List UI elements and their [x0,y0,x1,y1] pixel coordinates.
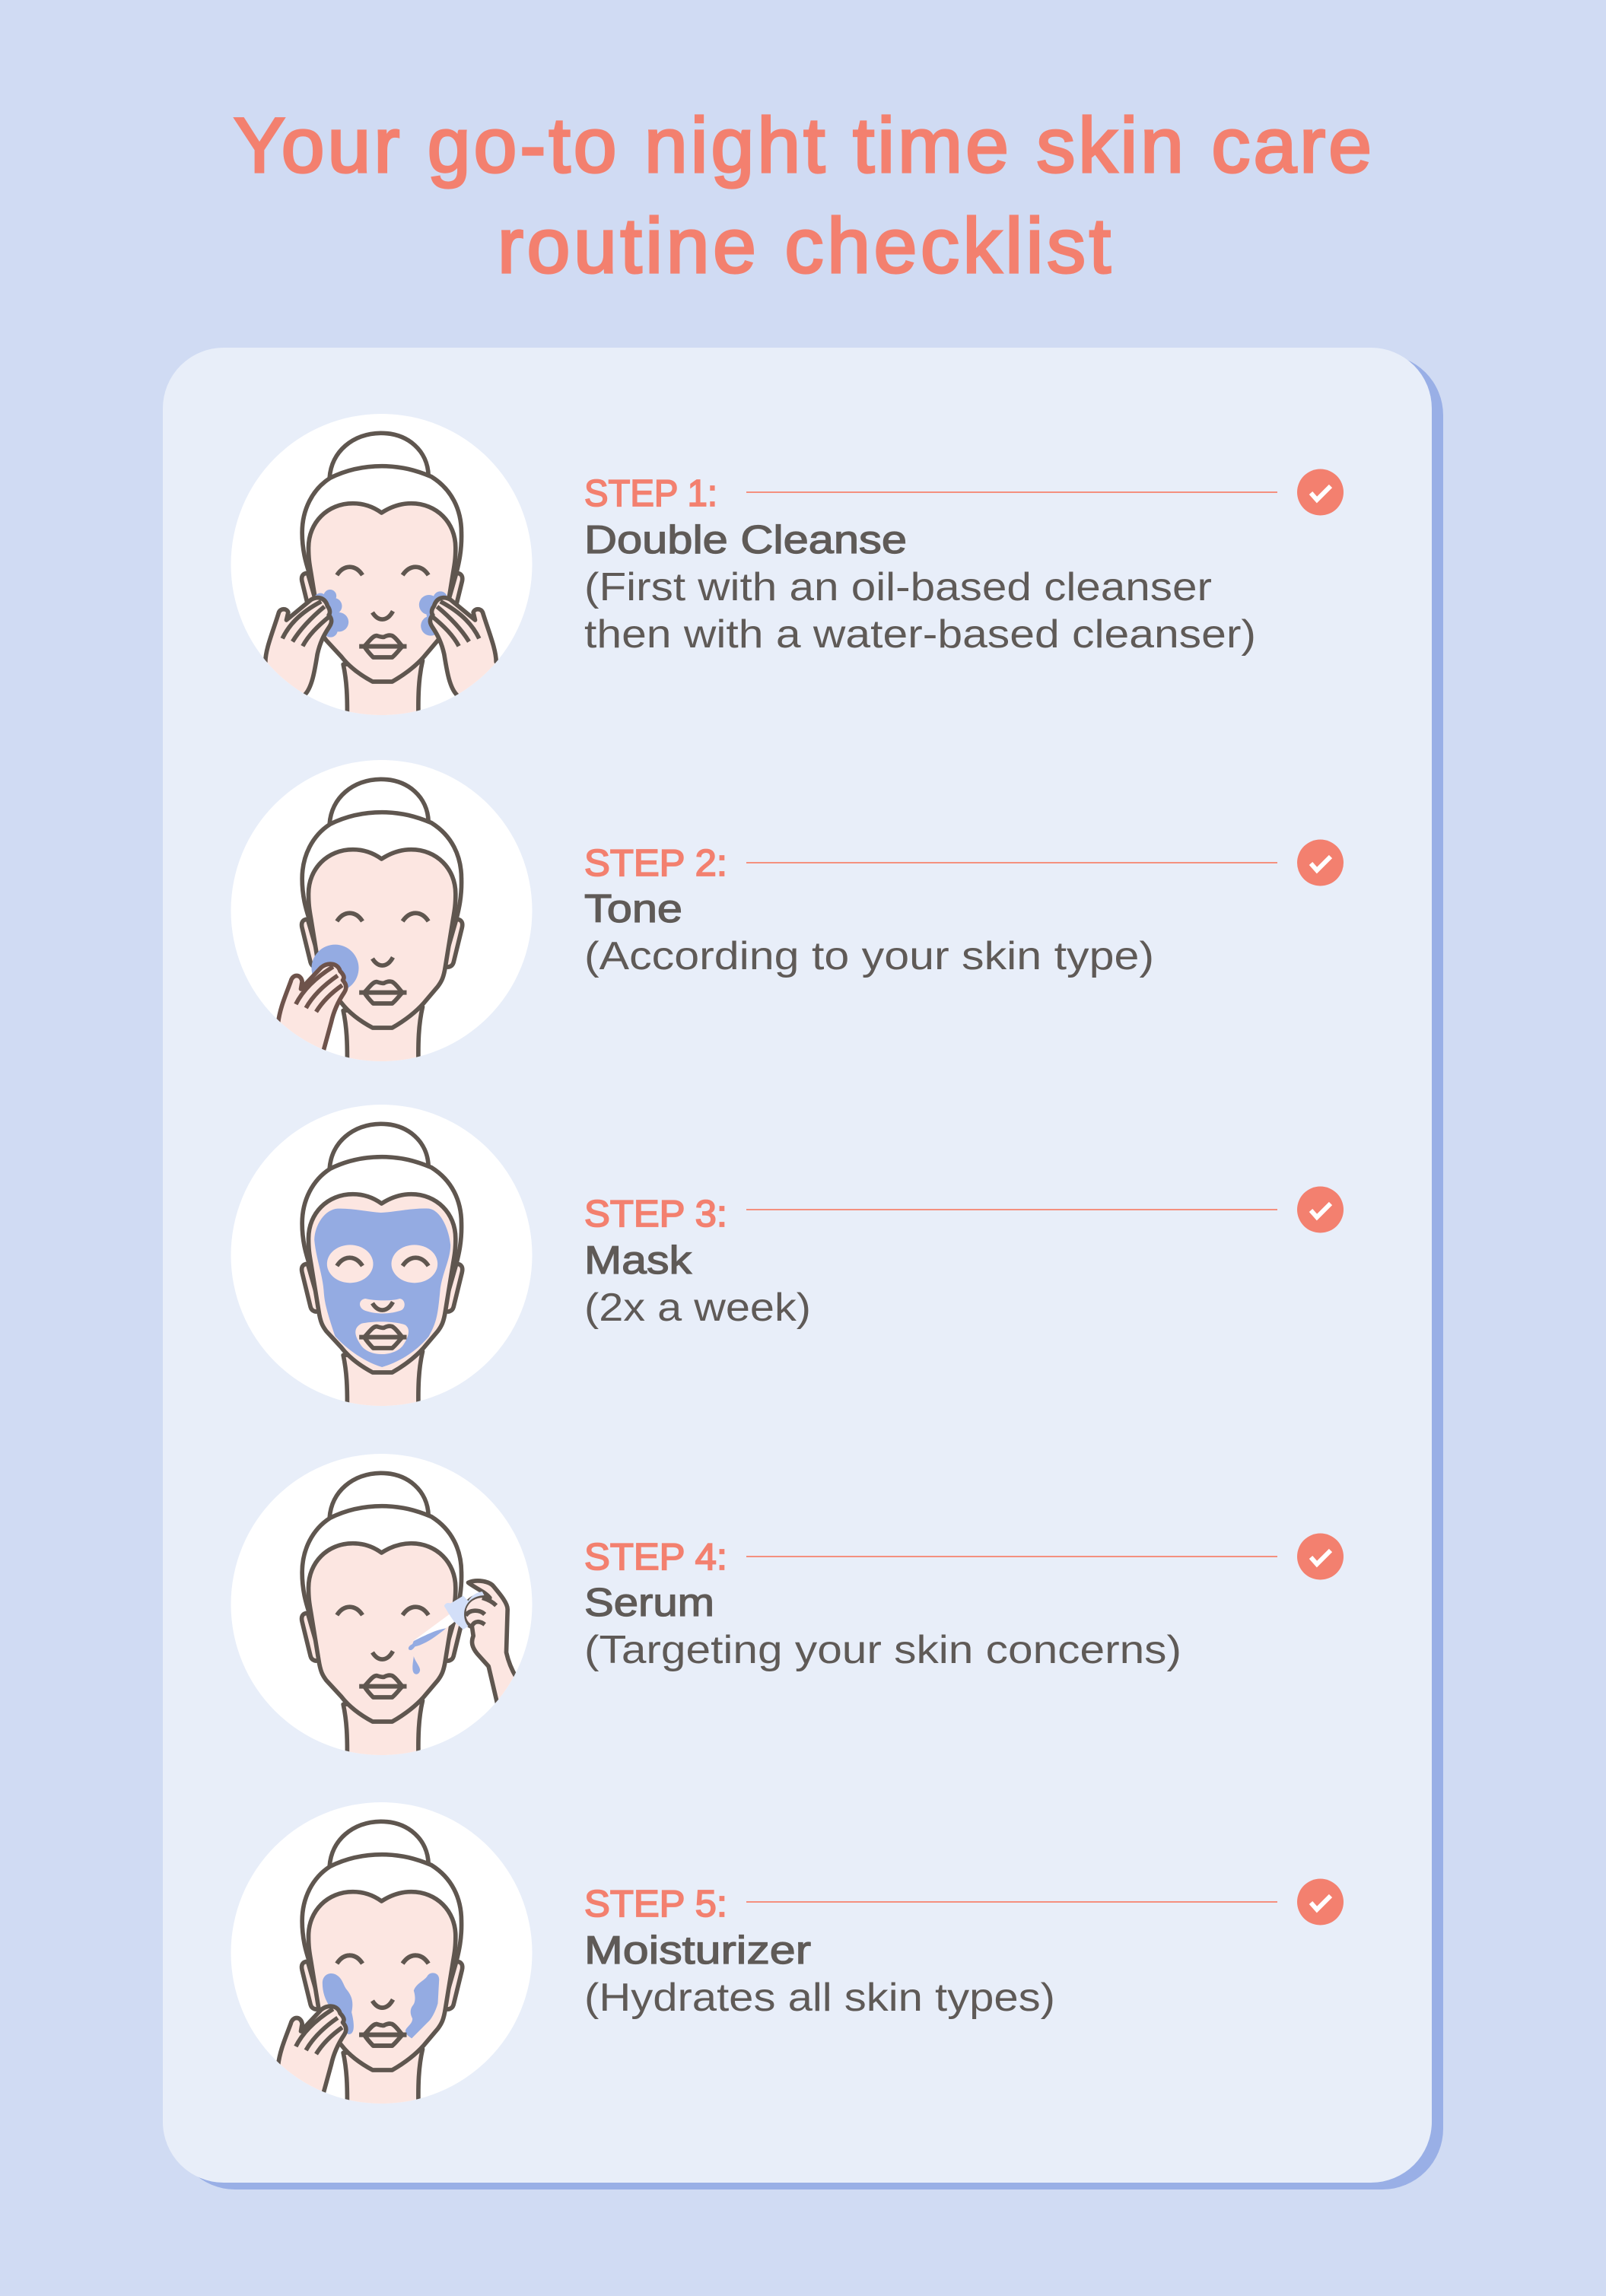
step 5 text: Moisturizer [584,1929,811,1973]
step 2 text: STEP 2: [584,843,727,884]
step 3 connector line [746,1209,1277,1210]
step 4 connector line [746,1556,1277,1557]
step 2 text: Tone [584,887,682,931]
icon: step 4 serum dropper [231,1454,532,1770]
icon: step 3 check [1297,1187,1344,1232]
icon: step 5 check [1297,1879,1344,1925]
icon: step 2 toner pad face [231,760,532,1076]
icon: step 4 check [1297,1534,1344,1579]
step 1 text: (First with an oil-based cleanser [584,565,1212,609]
step 5 connector line [746,1901,1277,1903]
title: Your go-to night time skin care [234,102,1372,189]
icon: step 5 moisturizer face [231,1802,532,2119]
step 1 text: STEP 1: [584,473,717,514]
icon: step 2 check [1297,840,1344,886]
step 2 connector line [746,862,1277,863]
step 4 text: STEP 4: [584,1537,727,1578]
step 2 text [584,843,1154,978]
step 2 text: (According to your skin type) [584,934,1154,978]
step 1 text: Double Cleanse [584,518,907,562]
step 5 text: (Hydrates all skin types) [584,1976,1055,2020]
step 1 connector line [746,491,1277,493]
step 4 text: Serum [584,1581,714,1625]
icon: step 1 double cleanse face [231,414,532,730]
step 1 text [584,473,1256,657]
step 4 text: (Targeting your skin concerns) [584,1628,1181,1672]
step 5 text [584,1884,1055,2020]
icon: step 3 face mask [231,1105,532,1421]
title: routine checklist [498,202,1111,289]
step 3 text: (2x a week) [584,1286,811,1330]
step 3 text: STEP 3: [584,1194,727,1235]
step 3 text: Mask [584,1239,692,1283]
panel: checklist card [163,348,1443,2189]
icon: step 1 check [1297,469,1344,516]
step 1 text: then with a water-based cleanser) [584,612,1256,657]
title [234,102,1372,289]
step 5 text: STEP 5: [584,1884,727,1925]
step 4 text [584,1537,1181,1672]
step 3 text [584,1194,811,1330]
